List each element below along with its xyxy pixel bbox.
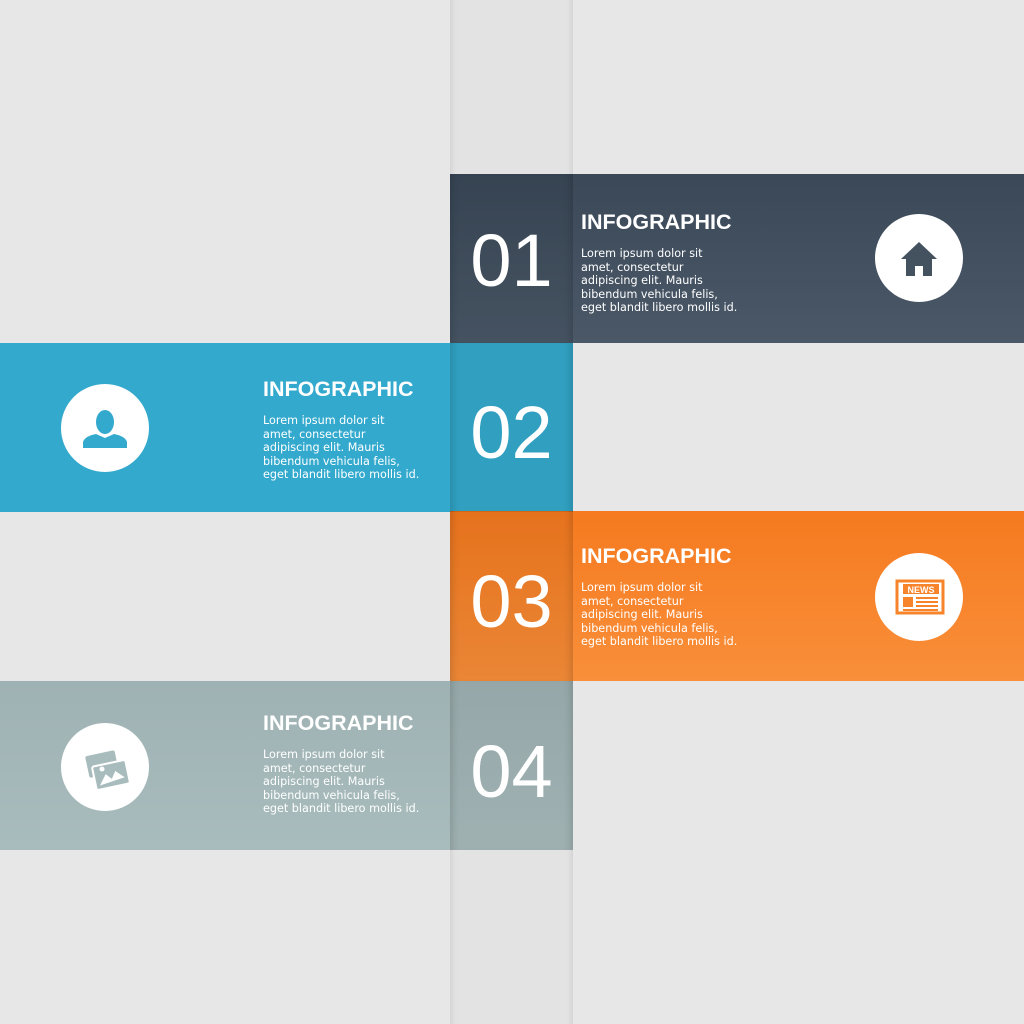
text 3: amet, consectetur bbox=[581, 595, 683, 608]
heading 1: INFOGRAPHIC bbox=[581, 210, 732, 234]
text 3: eget blandit libero mollis id. bbox=[581, 635, 737, 648]
number 01: 01 bbox=[470, 219, 553, 302]
panel 2 bbox=[0, 343, 573, 512]
icon: person bbox=[61, 384, 149, 472]
heading 3: INFOGRAPHIC bbox=[581, 544, 732, 568]
text 3: bibendum vehicula felis, bbox=[581, 622, 718, 635]
text 1: bibendum vehicula felis, bbox=[581, 288, 718, 301]
number 02: 02 bbox=[470, 391, 553, 474]
text 2: adipiscing elit. Mauris bbox=[263, 441, 385, 454]
text 4: eget blandit libero mollis id. bbox=[263, 802, 419, 815]
text 2: amet, consectetur bbox=[263, 428, 365, 441]
text 4: amet, consectetur bbox=[263, 762, 365, 775]
text 1 bbox=[581, 247, 737, 314]
number 03: 03 bbox=[470, 560, 553, 643]
number 04: 04 bbox=[470, 730, 553, 813]
text 2: bibendum vehicula felis, bbox=[263, 455, 400, 468]
heading 2: INFOGRAPHIC bbox=[263, 377, 414, 401]
text 4 bbox=[263, 748, 419, 815]
text 3 bbox=[581, 581, 737, 648]
text 3: adipiscing elit. Mauris bbox=[581, 608, 703, 621]
text 4: Lorem ipsum dolor sit bbox=[263, 748, 385, 761]
text 1: amet, consectetur bbox=[581, 261, 683, 274]
panel 3 bbox=[450, 511, 1024, 681]
panel 4 bbox=[0, 681, 573, 850]
text 1: adipiscing elit. Mauris bbox=[581, 274, 703, 287]
text 1: eget blandit libero mollis id. bbox=[581, 301, 737, 314]
text 4: bibendum vehicula felis, bbox=[263, 789, 400, 802]
panel 1 bbox=[450, 174, 1024, 343]
heading 4: INFOGRAPHIC bbox=[263, 711, 414, 735]
icon: photos bbox=[61, 723, 149, 811]
text 2 bbox=[263, 414, 419, 481]
icon: home bbox=[875, 214, 963, 302]
text 2: Lorem ipsum dolor sit bbox=[263, 414, 385, 427]
icon: news bbox=[875, 553, 963, 641]
text 2: eget blandit libero mollis id. bbox=[263, 468, 419, 481]
text 4: adipiscing elit. Mauris bbox=[263, 775, 385, 788]
icon: news: NEWS bbox=[908, 585, 934, 595]
text 1: Lorem ipsum dolor sit bbox=[581, 247, 703, 260]
text 3: Lorem ipsum dolor sit bbox=[581, 581, 703, 594]
